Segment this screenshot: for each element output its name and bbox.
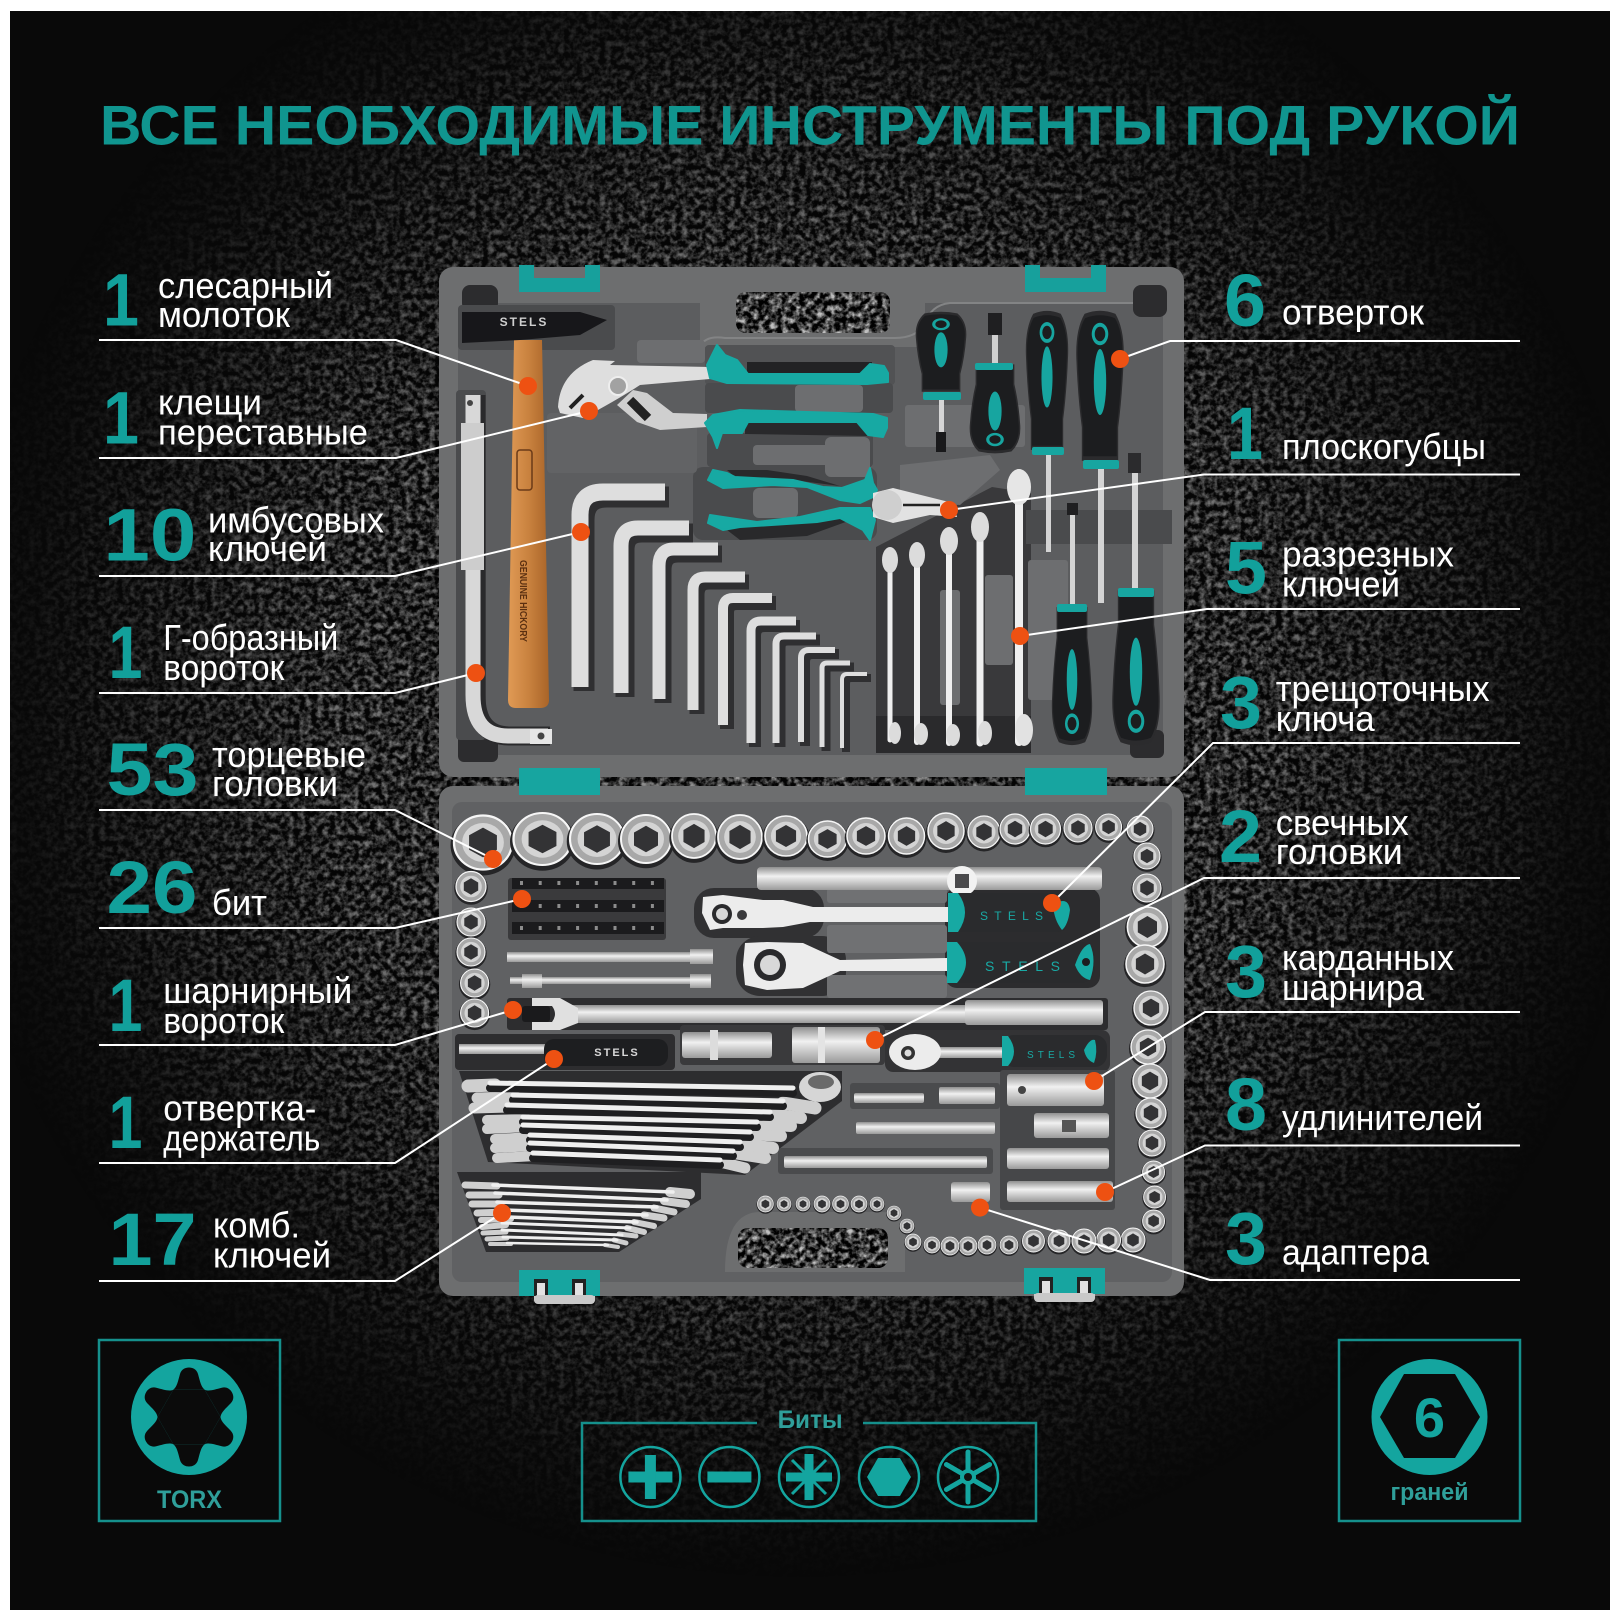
panel: hex 6 bbox=[1339, 1340, 1520, 1521]
latches bbox=[519, 1268, 1105, 1304]
ratchet handle second: STELS bbox=[985, 958, 1060, 974]
label: 17 комб. ключей: комб. bbox=[213, 1204, 300, 1246]
label: 8 удлинителей bbox=[1096, 1063, 1520, 1201]
label: 3 карданных шарнира: 3 bbox=[1225, 930, 1267, 1013]
label: 3 адаптера: адаптера bbox=[1282, 1232, 1430, 1273]
label: 1 слесарный молоток: молоток bbox=[158, 294, 290, 335]
label: 1 отвертка-держатель bbox=[99, 1050, 563, 1164]
label: 5 разрезных ключей: 5 bbox=[1225, 526, 1267, 610]
hammer bbox=[462, 312, 607, 708]
icon: phillips bbox=[620, 1447, 680, 1507]
title: ВСЕ НЕОБХОДИМЫЕ ИНСТРУМЕНТЫ ПОД РУКОЙ bbox=[100, 94, 1520, 156]
ratchet handle large bbox=[702, 893, 1070, 932]
handle bump bbox=[700, 295, 925, 347]
screwdriver holder bbox=[459, 1039, 668, 1066]
label: 1 плоскогубцы: плоскогубцы bbox=[1282, 426, 1486, 467]
tool cavities bbox=[456, 305, 1172, 753]
handle opening bbox=[725, 1212, 905, 1272]
hammer: STELS bbox=[500, 315, 548, 329]
icon: slotted bbox=[699, 1447, 759, 1507]
label: 1 отвертка-держатель: держатель bbox=[163, 1118, 320, 1159]
label: 3 трещоточных ключа: трещоточных bbox=[1276, 668, 1490, 709]
label: 10 имбусовых ключей: ключей bbox=[208, 528, 327, 569]
label: 17 комб. ключей: 17 bbox=[108, 1198, 196, 1281]
cavities bbox=[455, 878, 1115, 1252]
label: 1 клещи переставные: клещи bbox=[158, 382, 262, 422]
icon: pozidriv bbox=[779, 1447, 839, 1507]
lighter moulded blocks bbox=[547, 340, 1068, 705]
corner pockets bbox=[458, 285, 1167, 762]
open-end wrenches bbox=[882, 469, 1033, 746]
icon: hex bbox=[859, 1447, 919, 1507]
label: 53 торцевые головки bbox=[99, 728, 502, 868]
icon: hexagon socket bbox=[1372, 1359, 1488, 1475]
label: 17 комб. ключей: ключей bbox=[213, 1235, 331, 1276]
label: 1 Г-образный вороток: вороток bbox=[163, 647, 285, 688]
label: 1 шарнирный вороток: 1 bbox=[108, 964, 142, 1047]
label: 5 разрезных ключей: разрезных bbox=[1282, 534, 1454, 574]
label: 1 плоскогубцы: 1 bbox=[1227, 392, 1263, 475]
label: 5 разрезных ключей bbox=[1011, 526, 1520, 645]
small ratchet bbox=[889, 1034, 1107, 1070]
label: 3 карданных шарнира: шарнира bbox=[1282, 967, 1425, 1008]
icon: torx circle bbox=[131, 1359, 247, 1475]
label: 10 имбусовых ключей: 10 bbox=[103, 494, 196, 576]
panel: TORX bbox=[99, 1340, 280, 1521]
label: 1 Г-образный вороток: 1 bbox=[108, 611, 142, 694]
label: 8 удлинителей: 8 bbox=[1225, 1063, 1267, 1146]
label: 53 торцевые головки: торцевые bbox=[212, 734, 366, 775]
label: 2 свечных головки: свечных bbox=[1276, 802, 1409, 843]
label: 26 бит: 26 bbox=[106, 846, 198, 929]
label: 1 слесарный молоток bbox=[99, 259, 537, 395]
combination pliers bbox=[708, 468, 957, 540]
label: 3 трещоточных ключа: ключа bbox=[1276, 698, 1376, 739]
icon: torx spokes bbox=[938, 1447, 998, 1507]
TORX caption: TORX bbox=[157, 1486, 222, 1514]
label: 3 карданных шарнира bbox=[1085, 930, 1520, 1090]
label: 10 имбусовых ключей bbox=[99, 494, 590, 576]
label: 53 торцевые головки: 53 bbox=[106, 728, 198, 811]
label: 2 свечных головки: 2 bbox=[1219, 795, 1262, 878]
label: 1 клещи переставные: переставные bbox=[158, 412, 368, 452]
small ratchet: STELS bbox=[1027, 1050, 1075, 1061]
label: 3 трещоточных ключа: 3 bbox=[1220, 661, 1262, 744]
label: 17 комб. ключей bbox=[99, 1198, 511, 1281]
socket heads bbox=[451, 812, 1170, 1257]
L-handle wrench bbox=[461, 395, 552, 744]
label: 5 разрезных ключей: ключей bbox=[1282, 564, 1400, 604]
universal joints, adapters and extensions bbox=[784, 1074, 1113, 1202]
label: 1 отвертка-держатель: отвертка- bbox=[163, 1088, 316, 1129]
ratchet handle large: STELS bbox=[980, 909, 1043, 923]
label: 26 бит: бит bbox=[212, 882, 267, 923]
hex keys bbox=[580, 492, 871, 752]
long hinged handle bbox=[522, 998, 1103, 1030]
label: 6 отверток bbox=[1111, 259, 1520, 368]
label: 3 адаптера: 3 bbox=[1225, 1197, 1267, 1280]
panel: lower tray of the case bbox=[439, 780, 1184, 1304]
water pump pliers bbox=[558, 345, 888, 448]
label: 1 шарнирный вороток bbox=[99, 964, 522, 1047]
hammer: GENUINE HICKORY bbox=[517, 560, 528, 642]
label: 3 адаптера bbox=[971, 1197, 1520, 1280]
large combination wrenches bbox=[468, 1072, 841, 1168]
label: 2 свечных головки bbox=[866, 795, 1520, 1049]
label: 1 Г-образный вороток: Г-образный bbox=[163, 617, 338, 658]
spark plug sockets bbox=[682, 1027, 880, 1063]
label: 1 слесарный молоток: слесарный bbox=[158, 265, 333, 306]
label: 1 клещи переставные: 1 bbox=[103, 376, 139, 460]
moulded blocks bbox=[827, 888, 947, 998]
label: 1 слесарный молоток: 1 bbox=[103, 259, 139, 342]
hinges bbox=[519, 768, 1107, 794]
label: 1 отвертка-держатель: 1 bbox=[108, 1081, 142, 1164]
label: 2 свечных головки: головки bbox=[1276, 831, 1403, 872]
upper right clasp bbox=[1025, 265, 1106, 292]
bits bbox=[512, 878, 665, 934]
label: 26 бит bbox=[99, 846, 531, 929]
label: 1 шарнирный вороток: шарнирный bbox=[163, 970, 352, 1011]
label: 10 имбусовых ключей: имбусовых bbox=[208, 500, 384, 540]
upper left clasp bbox=[519, 265, 600, 292]
label: 6 отверток: 6 bbox=[1224, 259, 1266, 342]
label: 1 клещи переставные bbox=[99, 376, 598, 460]
screwdriver holder: STELS bbox=[594, 1047, 640, 1059]
screwdrivers bbox=[916, 313, 1159, 743]
label: 3 карданных шарнира: карданных bbox=[1282, 937, 1454, 978]
label: 3 трещоточных ключа bbox=[1043, 661, 1520, 912]
panel: bits bbox=[582, 1406, 1036, 1521]
panel: upper tray of the case bbox=[439, 265, 1184, 794]
label: 1 шарнирный вороток: вороток bbox=[163, 1000, 285, 1041]
label: 1 плоскогубцы bbox=[940, 392, 1520, 519]
hex caption: граней bbox=[1390, 1479, 1468, 1506]
label: 6 отверток: отверток bbox=[1282, 292, 1424, 333]
icon: hexagon socket: 6 bbox=[1414, 1386, 1445, 1449]
handle opening bbox=[736, 292, 890, 333]
label: 53 торцевые головки: головки bbox=[212, 763, 338, 804]
sliding T-bar bbox=[757, 866, 1102, 896]
bits heading: Биты bbox=[778, 1406, 843, 1434]
label: 8 удлинителей: удлинителей bbox=[1282, 1097, 1483, 1138]
label: 1 Г-образный вороток bbox=[99, 611, 485, 694]
ratchet handle second bbox=[743, 942, 1095, 990]
extension bars bbox=[507, 949, 713, 988]
small combination wrenches bbox=[465, 1185, 690, 1247]
